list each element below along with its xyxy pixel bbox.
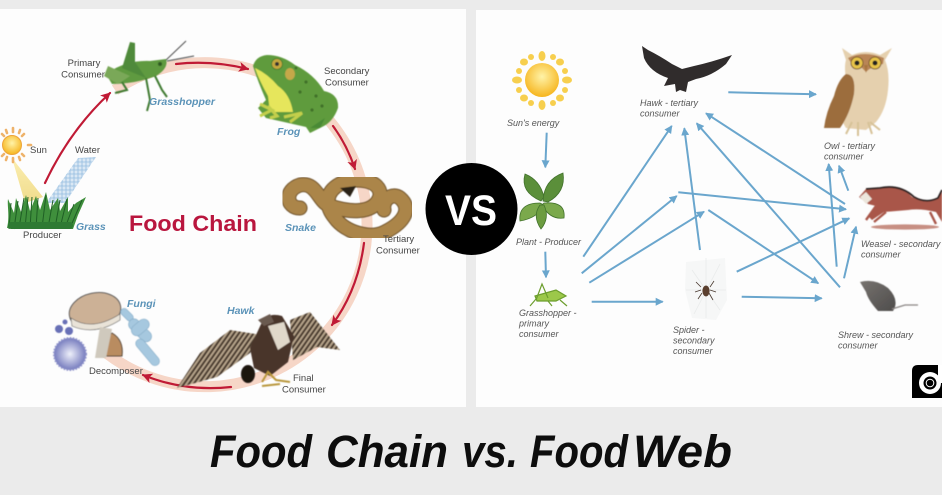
final consumer label: Consumer xyxy=(282,384,326,396)
tertiary consumer label: Consumer xyxy=(376,246,420,256)
water label: Water xyxy=(75,145,100,156)
icon: grasshopper xyxy=(104,41,194,111)
primary consumer label: Primary xyxy=(68,58,100,69)
label: grasshopper: Grasshopper - xyxy=(519,308,577,318)
arrow: grasshopper to frog xyxy=(176,63,248,69)
secondary consumer label: Secondary xyxy=(324,66,369,77)
ring behind the chain xyxy=(100,63,367,387)
heading: food chain: Food Chain xyxy=(129,211,257,236)
icon: black hawk xyxy=(642,46,732,92)
panel: food web xyxy=(476,10,942,407)
secondary consumer label: Consumer xyxy=(325,78,369,88)
icon: weasel xyxy=(859,187,942,230)
icon: brand logo xyxy=(912,365,942,398)
arrow: hawk to decomposer xyxy=(143,375,231,388)
panel: food chain xyxy=(0,9,466,407)
sun label: Sun xyxy=(30,145,47,156)
icon: water droplets xyxy=(46,157,96,203)
final consumer label: Final xyxy=(293,373,314,384)
title: vs. xyxy=(462,426,518,477)
arrows: food web links xyxy=(545,92,856,302)
icon: small grasshopper xyxy=(530,284,567,306)
hawk label: Hawk xyxy=(227,305,256,317)
snake label: Snake xyxy=(285,222,316,234)
icon: grass xyxy=(7,192,86,229)
label: hawk: consumer xyxy=(640,108,681,118)
icon: snake xyxy=(289,180,406,235)
label: owl: consumer xyxy=(824,152,865,162)
label: hawk: Hawk - tertiary xyxy=(640,98,698,108)
label: spider: secondary xyxy=(673,336,715,346)
label: grasshopper: primary xyxy=(518,318,550,328)
badge: VS: VS xyxy=(445,187,497,235)
label: shrew: Shrew - secondary xyxy=(838,330,913,340)
label: spider: Spider - xyxy=(673,325,705,335)
arrow: snake to hawk xyxy=(332,243,364,325)
tertiary consumer label: Tertiary xyxy=(383,234,414,245)
icon: spider on web xyxy=(685,258,727,320)
decomposer label: Decomposer xyxy=(89,366,143,377)
icon: owl xyxy=(824,48,892,136)
frog label: Frog xyxy=(277,126,301,138)
icon: hawk xyxy=(177,312,340,388)
arrow: grass to grasshopper xyxy=(45,93,110,183)
title xyxy=(210,426,732,477)
label: plant: Plant - Producer xyxy=(516,237,582,247)
label: sun's energy: Sun's energy xyxy=(507,118,560,128)
label: spider: consumer xyxy=(673,346,714,356)
icon: frog xyxy=(253,55,338,133)
label: grasshopper: consumer xyxy=(519,329,560,339)
icon: plant xyxy=(520,173,564,229)
icon: decomposers xyxy=(54,288,161,370)
title: Web xyxy=(633,426,732,477)
grass label: Grass xyxy=(76,221,106,233)
producer label: Producer xyxy=(23,230,62,241)
arrow: frog to snake xyxy=(333,126,355,169)
label: weasel: Weasel - secondary xyxy=(861,239,940,249)
title: Chain xyxy=(326,426,448,477)
badge: VS xyxy=(426,163,518,255)
label: owl: Owl - tertiary xyxy=(824,141,875,151)
title: Food xyxy=(530,426,629,477)
icon: shrew xyxy=(860,281,918,311)
label: weasel: consumer xyxy=(861,250,902,260)
grasshopper label: Grasshopper xyxy=(149,96,216,108)
fungi label: Fungi xyxy=(127,298,157,310)
primary consumer label: Consumer xyxy=(61,70,105,80)
icon: sun xyxy=(0,128,43,203)
title: Food xyxy=(210,426,313,477)
icon: sun xyxy=(512,51,572,110)
label: shrew: consumer xyxy=(838,340,879,350)
